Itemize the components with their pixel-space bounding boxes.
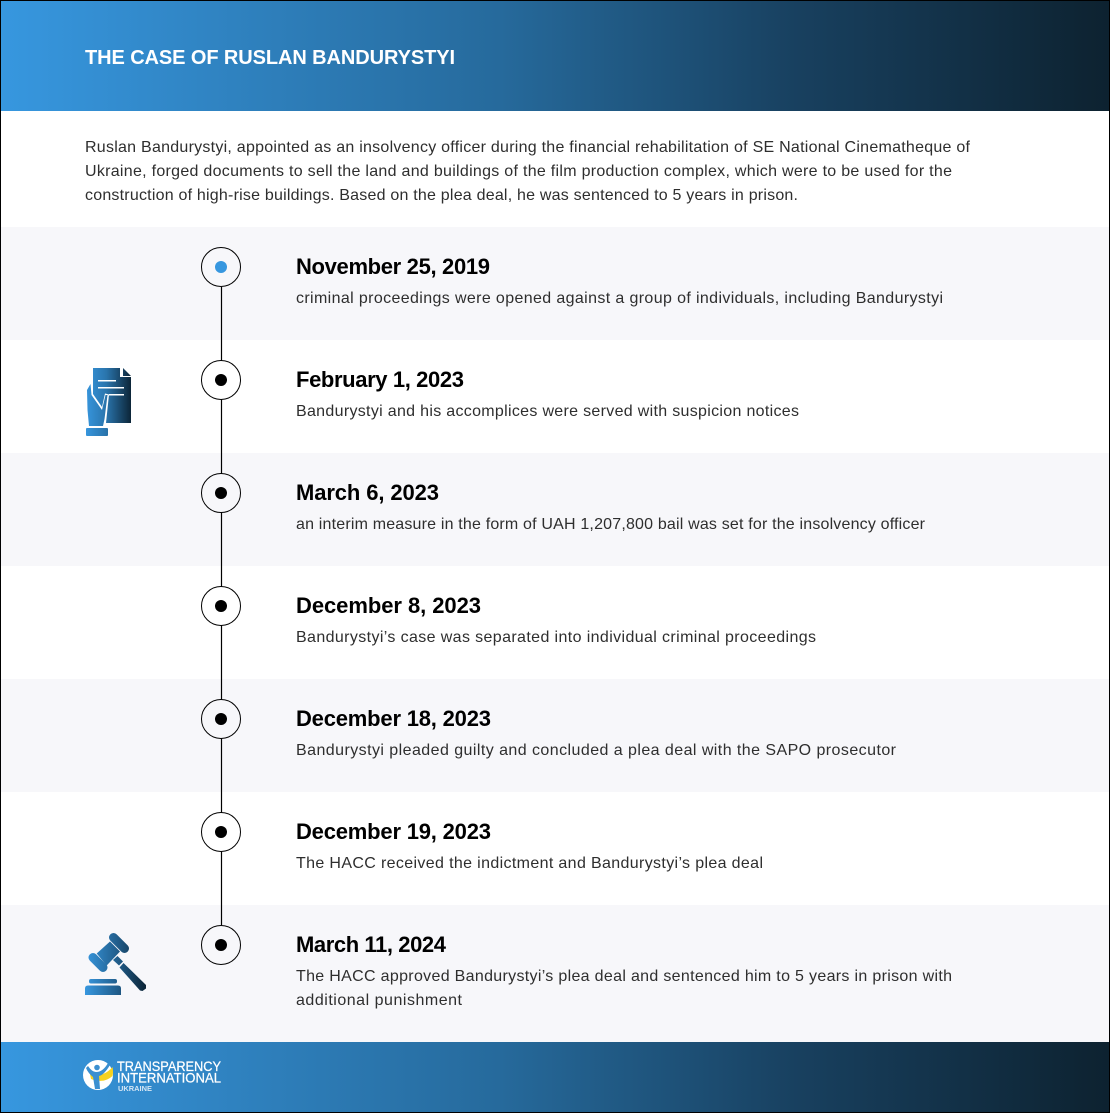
intro text: Ruslan Bandurystyi, appointed as an insolvency officer during the financial rehabilitation of SE National Cinematheque of xyxy=(85,139,971,156)
timeline event: December 8, 2023: Bandurystyi’s case was separated into individual criminal proceedings xyxy=(296,629,816,646)
intro text: Ukraine, forged documents to sell the land and buildings of the film production complex, which were to be used for the xyxy=(85,163,952,180)
timeline event: March 6, 2023: an interim measure in the form of UAH 1,207,800 bail was set for the insolvency officer xyxy=(296,516,926,533)
timeline event: March 6, 2023: March 6, 2023 xyxy=(296,480,439,505)
intro text: construction of high-rise buildings. Based on the plea deal, he was sentenced to 5 years in prison. xyxy=(85,187,798,204)
timeline event: November 25, 2019: criminal proceedings were opened against a group of individuals, including Bandurystyi xyxy=(296,290,943,307)
timeline event: March 11, 2024: additional punishment xyxy=(296,992,463,1009)
timeline event: December 19, 2023: December 19, 2023 xyxy=(296,819,491,844)
logo: Transparency International Ukraine: TRANSPARENCY xyxy=(117,1058,222,1074)
icon: gavel xyxy=(85,938,146,995)
timeline event: December 18, 2023: December 18, 2023 xyxy=(296,706,491,731)
timeline event: December 19, 2023: The HACC received the indictment and Bandurystyi’s plea deal xyxy=(296,855,763,872)
row background: November 25, 2019 xyxy=(1,227,1109,340)
logo: Transparency International Ukraine: UKRAINE xyxy=(118,1084,152,1093)
timeline event: December 19, 2023 xyxy=(202,812,763,872)
intro text xyxy=(85,139,971,204)
timeline event: February 1, 2023 xyxy=(202,360,799,420)
timeline event: March 6, 2023 xyxy=(202,474,926,533)
header banner xyxy=(1,1,1109,111)
logo: Transparency International Ukraine: INTERNATIONAL xyxy=(117,1070,221,1086)
timeline event: March 11, 2024 xyxy=(202,926,952,1009)
timeline event: February 1, 2023: Bandurystyi and his accomplices were served with suspicion notices xyxy=(296,403,799,420)
logo: Transparency International Ukraine xyxy=(83,1058,222,1093)
timeline line xyxy=(220,287,222,925)
row background: December 18, 2023 xyxy=(1,679,1109,792)
row background: March 6, 2023 xyxy=(1,453,1109,566)
timeline event: March 11, 2024: The HACC approved Bandurystyi’s plea deal and sentenced him to 5 years in prison with xyxy=(296,968,952,985)
title: THE CASE OF RUSLAN BANDURYSTYI xyxy=(85,47,455,69)
timeline event: December 18, 2023: Bandurystyi pleaded guilty and concluded a plea deal with the SAPO prosecutor xyxy=(296,742,897,759)
timeline event: December 18, 2023 xyxy=(202,700,897,759)
timeline event: February 1, 2023: February 1, 2023 xyxy=(296,367,464,392)
timeline event: December 8, 2023 xyxy=(202,586,816,646)
timeline event: December 8, 2023: December 8, 2023 xyxy=(296,593,481,618)
icon: hand holding document xyxy=(86,368,131,436)
timeline event: November 25, 2019 xyxy=(202,248,943,307)
row background: March 11, 2024 xyxy=(1,905,1109,1042)
footer banner xyxy=(1,1042,1109,1112)
timeline event: November 25, 2019: November 25, 2019 xyxy=(296,254,490,279)
timeline event: March 11, 2024: March 11, 2024 xyxy=(296,932,447,957)
